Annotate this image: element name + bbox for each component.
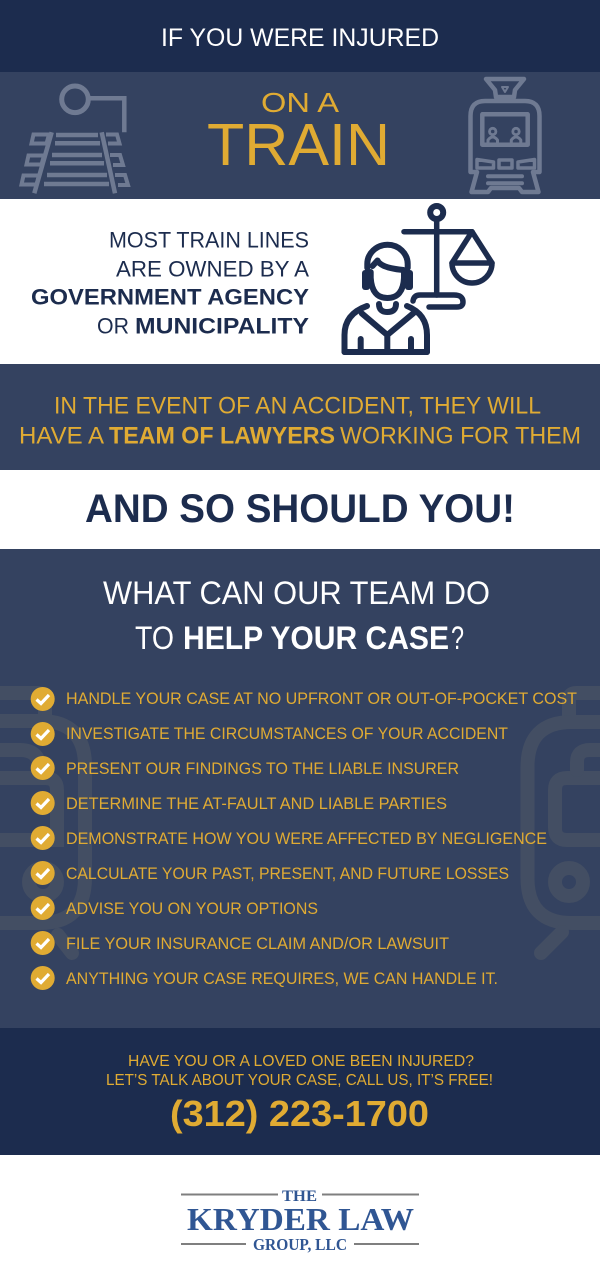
icon: tram front bbox=[470, 79, 540, 192]
text: or municipality: OR bbox=[97, 314, 129, 338]
text: are owned by a: ARE OWNED BY A bbox=[116, 256, 309, 282]
text: most train lines: MOST TRAIN LINES bbox=[109, 228, 309, 252]
list item 7 bbox=[31, 896, 318, 920]
text: phone number: (312) 223-1700 bbox=[170, 1093, 429, 1134]
text: have a team of lawyers working for them: TEAM OF LAWYERS bbox=[109, 422, 335, 450]
list item 8: FILE YOUR INSURANCE CLAIM AND/OR LAWSUIT bbox=[66, 934, 449, 953]
icon: ghost train left bbox=[0, 693, 85, 953]
panel: team of lawyers bbox=[0, 364, 600, 470]
text: or municipality: MUNICIPALITY bbox=[135, 314, 309, 338]
icon: railway track and signal bbox=[22, 86, 128, 193]
list item 9: ANYTHING YOUR CASE REQUIRES, WE CAN HANDLE IT. bbox=[66, 969, 498, 988]
text: let's talk: LET’S TALK ABOUT YOUR CASE, CALL US, IT’S FREE! bbox=[106, 1072, 493, 1089]
panel: call to action bbox=[0, 1028, 600, 1155]
heading: to help your case: HELP YOUR CASE bbox=[183, 620, 449, 656]
logo: the kryder law group: KRYDER LAW bbox=[187, 1201, 414, 1237]
heading: if you were injured: IF YOU WERE INJURED bbox=[161, 24, 439, 52]
heading: to help your case: ? bbox=[451, 620, 464, 656]
list item 2 bbox=[31, 722, 508, 746]
text: train: TRAIN bbox=[207, 112, 390, 178]
text: have a team of lawyers working for them: HAVE A bbox=[19, 422, 105, 450]
text: have a team of lawyers working for them: WORKING FOR THEM bbox=[340, 422, 581, 450]
logo: the kryder law group bbox=[181, 1188, 419, 1254]
heading: and so should you: AND SO SHOULD YOU! bbox=[85, 487, 515, 531]
heading: what can our team do: WHAT CAN OUR TEAM DO bbox=[103, 575, 490, 611]
header band bbox=[0, 0, 600, 72]
list item 2: INVESTIGATE THE CIRCUMSTANCES OF YOUR ACCIDENT bbox=[66, 724, 508, 743]
panel: on a train bbox=[0, 72, 600, 199]
heading: to help your case: TO bbox=[135, 620, 174, 656]
checklist bbox=[31, 687, 577, 990]
text: have you or a loved one: HAVE YOU OR A LOVED ONE BEEN INJURED? bbox=[128, 1053, 474, 1070]
text: on a: ON A bbox=[261, 87, 339, 118]
logo: the kryder law group: THE bbox=[282, 1188, 317, 1205]
list item 6 bbox=[31, 861, 509, 885]
panel: government agency bbox=[31, 206, 492, 352]
list item 5: DEMONSTRATE HOW YOU WERE AFFECTED BY NEGLIGENCE bbox=[66, 829, 547, 848]
icon: lawyer with scales of justice bbox=[344, 206, 492, 352]
list item 6: CALCULATE YOUR PAST, PRESENT, AND FUTURE LOSSES bbox=[66, 864, 509, 883]
list item 1: HANDLE YOUR CASE AT NO UPFRONT OR OUT-OF-POCKET COST bbox=[66, 689, 577, 708]
icon: ghost train right bbox=[528, 693, 600, 953]
list item 3 bbox=[31, 756, 459, 780]
text: have a team of lawyers working for them bbox=[19, 422, 581, 450]
text: in the event of an accident: IN THE EVENT OF AN ACCIDENT, THEY WILL bbox=[54, 392, 541, 420]
panel: what can our team do bbox=[0, 549, 600, 1028]
list item 3: PRESENT OUR FINDINGS TO THE LIABLE INSURER bbox=[66, 759, 459, 778]
list item 9 bbox=[31, 966, 498, 990]
list item 7: ADVISE YOU ON YOUR OPTIONS bbox=[66, 899, 318, 918]
text: government agency: GOVERNMENT AGENCY bbox=[31, 284, 309, 310]
logo: the kryder law group: GROUP, LLC bbox=[253, 1235, 347, 1254]
list item 4: DETERMINE THE AT-FAULT AND LIABLE PARTIES bbox=[66, 794, 447, 813]
